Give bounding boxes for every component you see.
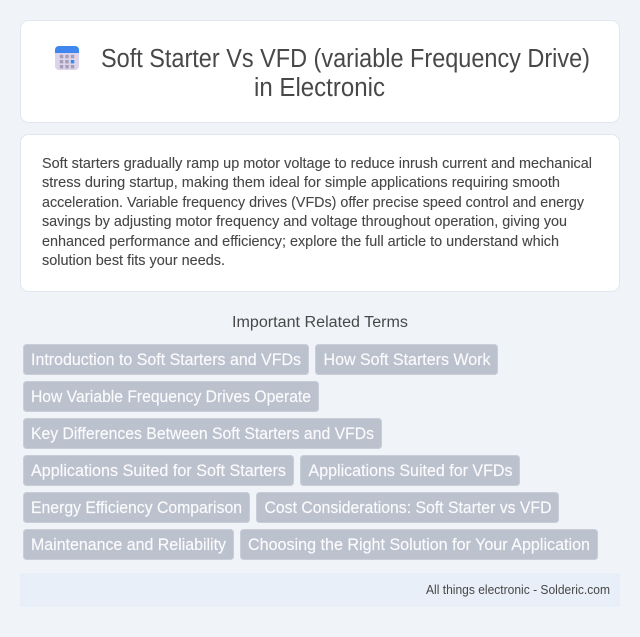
tag: key differences: [24, 418, 382, 448]
tag: maintenance: [24, 530, 234, 560]
icon: calendar grid: [55, 46, 79, 70]
title: Soft Starter Vs VFD (variable Frequency Drive): [101, 45, 590, 73]
tag: energy efficiency: [24, 492, 250, 522]
panel: summary paragraph: Soft starters gradually ramp up motor voltage to reduce inrush current and mechanical: [42, 156, 592, 172]
tag: how soft starters work: [316, 344, 498, 374]
heading: important related terms: Important Related Terms: [232, 314, 408, 331]
tag: energy efficiency: Energy Efficiency Comparison: [31, 498, 242, 517]
panel: summary paragraph: acceleration. Variable frequency drives (VFDs) offer precise speed control and energy: [42, 195, 585, 211]
tag: how VFDs operate: How Variable Frequency Drives Operate: [31, 387, 311, 406]
panel: summary paragraph: savings by adjusting motor frequency and voltage throughout operation, giving you: [42, 214, 567, 230]
panel: summary paragraph: [20, 134, 620, 292]
title: [101, 45, 590, 102]
tag: introduction: [24, 344, 308, 374]
tag: choosing the right solution: [240, 530, 598, 560]
tag: how VFDs operate: [24, 382, 318, 412]
tag: applications VFDs: [300, 456, 520, 486]
panel: summary paragraph: enhanced performance and efficiency; explore the full article to understand which: [42, 234, 559, 250]
tag: maintenance: Maintenance and Reliability: [31, 535, 227, 554]
tag: cost considerations: [256, 492, 558, 522]
footer bar: [20, 573, 620, 607]
panel: summary paragraph: solution best fits your needs.: [42, 253, 225, 269]
tag: key differences: Key Differences Between Soft Starters and VFDs: [31, 424, 374, 443]
tag: choosing the right solution: Choosing the Right Solution for Your Application: [248, 535, 590, 554]
panel: summary paragraph: stress during startup, making them ideal for simple applications requiring smooth: [42, 175, 560, 191]
tag: applications soft starters: [24, 456, 294, 486]
title: in Electronic: [254, 74, 385, 102]
tag: applications VFDs: Applications Suited for VFDs: [308, 461, 512, 480]
tag: how soft starters work: How Soft Starters Work: [324, 350, 491, 369]
panel: title card: [20, 20, 620, 122]
tag: cost considerations: Cost Considerations: Soft Starter vs VFD: [264, 498, 552, 517]
panel: related term tags: [24, 344, 598, 560]
tag: applications soft starters: Applications Suited for Soft Starters: [31, 461, 286, 480]
footer bar: All things electronic - Solderic.com: [426, 583, 610, 597]
tag: introduction: Introduction to Soft Starters and VFDs: [31, 350, 301, 369]
